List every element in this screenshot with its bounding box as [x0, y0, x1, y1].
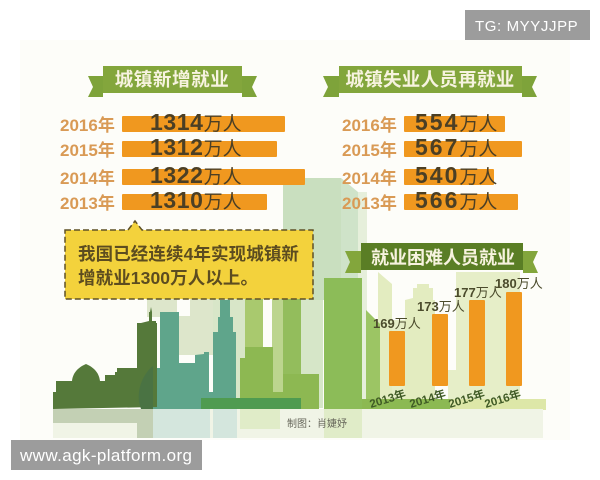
bar chart: re-employment: 2016年 [342, 115, 397, 135]
credit: 制图：肖婕妤 [287, 417, 347, 430]
watermark: top right: TG: MYYJJPP [475, 18, 578, 35]
bar chart: new urban jobs: 1310万人 [150, 187, 242, 213]
bar chart: re-employment [342, 109, 522, 213]
bar chart: difficulty employment: 169万人 [373, 316, 421, 331]
callout: 我国已经连续4年实现城镇新 [78, 244, 299, 264]
bar chart: new urban jobs: 1312万人 [150, 134, 242, 160]
bar chart: re-employment: 540万人 [415, 162, 497, 188]
heading: unemployed re-employment: 城镇失业人员再就业 [345, 69, 515, 90]
watermark: bottom left: www.agk-platform.org [19, 446, 192, 465]
bar chart: re-employment: 554万人 [415, 109, 497, 135]
bar chart: difficulty employment: 177万人 [454, 285, 502, 300]
bar chart: difficulty employment: 173万人 [417, 299, 465, 314]
bar chart: new urban jobs [60, 109, 305, 213]
bar chart: difficulty employment: 2015年 [447, 386, 487, 411]
bar chart: new urban jobs: 2013年 [60, 193, 115, 213]
heading: employment of people with difficulties: 就业困难人员就业 [371, 248, 515, 268]
callout [65, 221, 313, 299]
skyline illustration [53, 178, 546, 438]
bar chart: re-employment: 2014年 [342, 168, 397, 188]
bar chart: new urban jobs: 2014年 [60, 168, 115, 188]
bar chart: re-employment: 2015年 [342, 140, 397, 160]
watermark: top right [465, 10, 590, 40]
heading: new urban jobs: 城镇新增就业 [115, 69, 229, 90]
heading: new urban jobs [88, 66, 257, 97]
heading: unemployed re-employment [323, 66, 537, 97]
bar chart: difficulty employment: 2016年 [483, 386, 523, 411]
bar chart: new urban jobs: 1322万人 [150, 162, 242, 188]
bar chart: re-employment: 566万人 [415, 187, 497, 213]
bar chart: difficulty employment [368, 276, 543, 411]
bar chart: new urban jobs: 1314万人 [150, 109, 242, 135]
heading: employment of people with difficulties [345, 243, 538, 273]
background panel [20, 40, 570, 440]
bar chart: new urban jobs: 2016年 [60, 115, 115, 135]
callout: 增就业1300万人以上。 [78, 268, 258, 288]
bar chart: difficulty employment: 2014年 [408, 386, 448, 411]
bar chart: re-employment: 567万人 [415, 134, 497, 160]
bar chart: difficulty employment: 180万人 [495, 276, 543, 291]
watermark: bottom left [11, 440, 202, 470]
bar chart: difficulty employment: 2013年 [368, 386, 408, 411]
bar chart: new urban jobs: 2015年 [60, 140, 115, 160]
bar chart: re-employment: 2013年 [342, 193, 397, 213]
